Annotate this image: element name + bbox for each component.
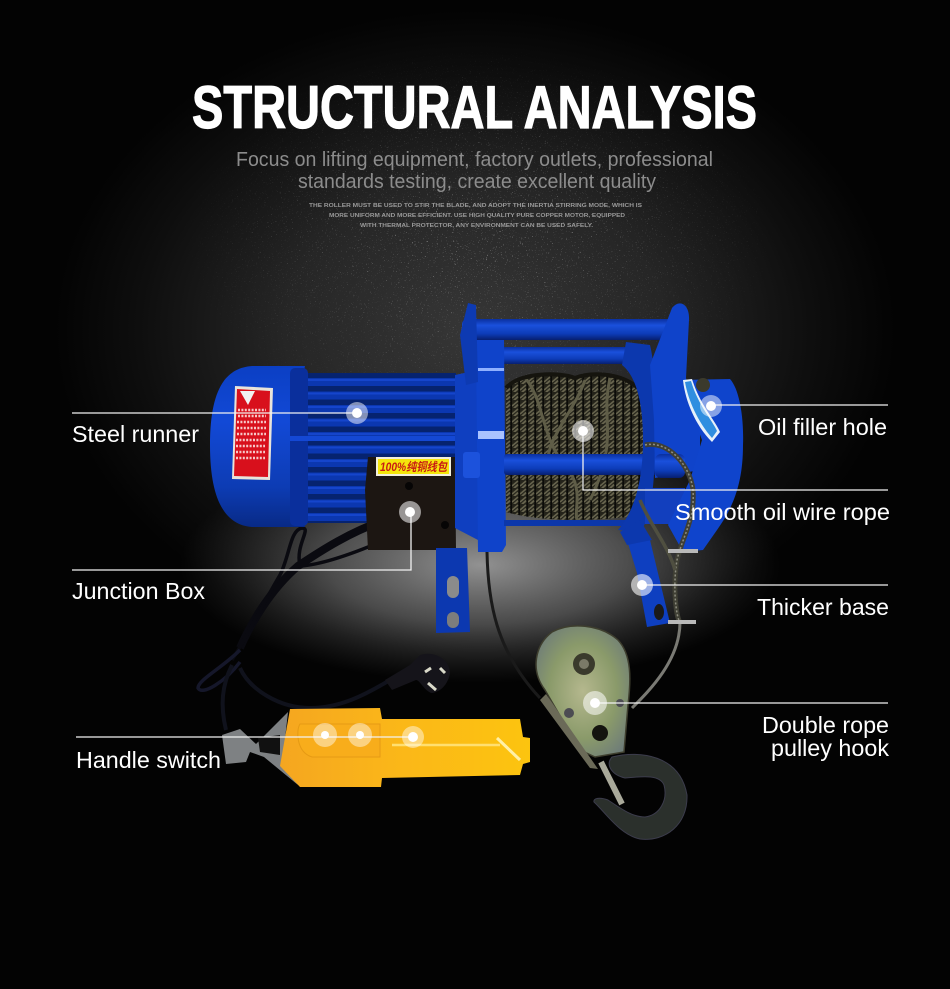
- small description text: MORE UNIFORM AND MORE EFFICIENT. USE HIGH QUALITY PURE COPPER MOTOR, EQUIPPED: [329, 213, 625, 219]
- hanging wire rope: [632, 444, 698, 708]
- motor end bell: [210, 366, 305, 527]
- callout: steel runner: Steel runner: [72, 421, 199, 447]
- right end cap: [668, 379, 743, 552]
- callout: junction box: [72, 501, 421, 604]
- copper coil label: 100%纯铜线包: [380, 460, 448, 474]
- subtitle: [236, 149, 713, 193]
- small description text: WITH THERMAL PROTECTOR, ANY ENVIRONMENT CAN BE USED SAFELY.: [360, 223, 594, 229]
- callout: double rope pulley hook: pulley hook: [771, 735, 890, 761]
- motor fins: [298, 373, 456, 523]
- pulley hook: [536, 626, 687, 839]
- callout: smooth oil wire rope: [572, 420, 890, 525]
- right drum flange: [618, 342, 655, 532]
- left plate: [476, 340, 506, 552]
- subtitle: standards testing, create excellent quality: [298, 171, 656, 193]
- right upright: [650, 303, 700, 478]
- control cables: [198, 520, 540, 730]
- subtitle: Focus on lifting equipment, factory outlets, professional: [236, 149, 713, 171]
- yellow handle body: [280, 708, 530, 787]
- plug: [385, 654, 450, 693]
- callout: handle switch: [76, 723, 424, 773]
- small description text: [309, 203, 642, 229]
- callout: double rope pulley hook: [583, 691, 890, 761]
- right foot: [627, 540, 670, 627]
- callout: thicker base: [631, 574, 889, 620]
- callout: steel runner: [72, 402, 368, 447]
- callout: handle switch: Handle switch: [76, 747, 221, 773]
- lower bar: [504, 454, 660, 475]
- wire rope drum: [506, 374, 644, 522]
- callout: junction box: Junction Box: [72, 578, 205, 604]
- callout: oil filler hole: Oil filler hole: [758, 414, 887, 440]
- callout: double rope pulley hook: Double rope: [762, 712, 889, 738]
- top bars: [462, 319, 682, 340]
- callout: thicker base: Thicker base: [757, 594, 889, 620]
- motor: [210, 366, 456, 527]
- background: [94, 40, 856, 676]
- small description text: THE ROLLER MUST BE USED TO STIR THE BLADE, AND ADOPT THE INERTIA STIRRING MODE, WHICH IS: [309, 203, 642, 209]
- pulley plate: [536, 626, 630, 757]
- frame motor flange: [455, 370, 478, 540]
- warning sticker: [232, 386, 273, 480]
- winch frame: [455, 303, 743, 627]
- plastic wrap: [222, 712, 298, 785]
- junction box: [365, 457, 456, 550]
- hook: [594, 754, 687, 839]
- left foot: [436, 548, 470, 633]
- callout: oil filler hole: [700, 395, 888, 440]
- title: STRUCTURAL ANALYSIS: [192, 74, 757, 141]
- handle switch: [222, 654, 530, 787]
- callout: smooth oil wire rope: Smooth oil wire rope: [675, 499, 890, 525]
